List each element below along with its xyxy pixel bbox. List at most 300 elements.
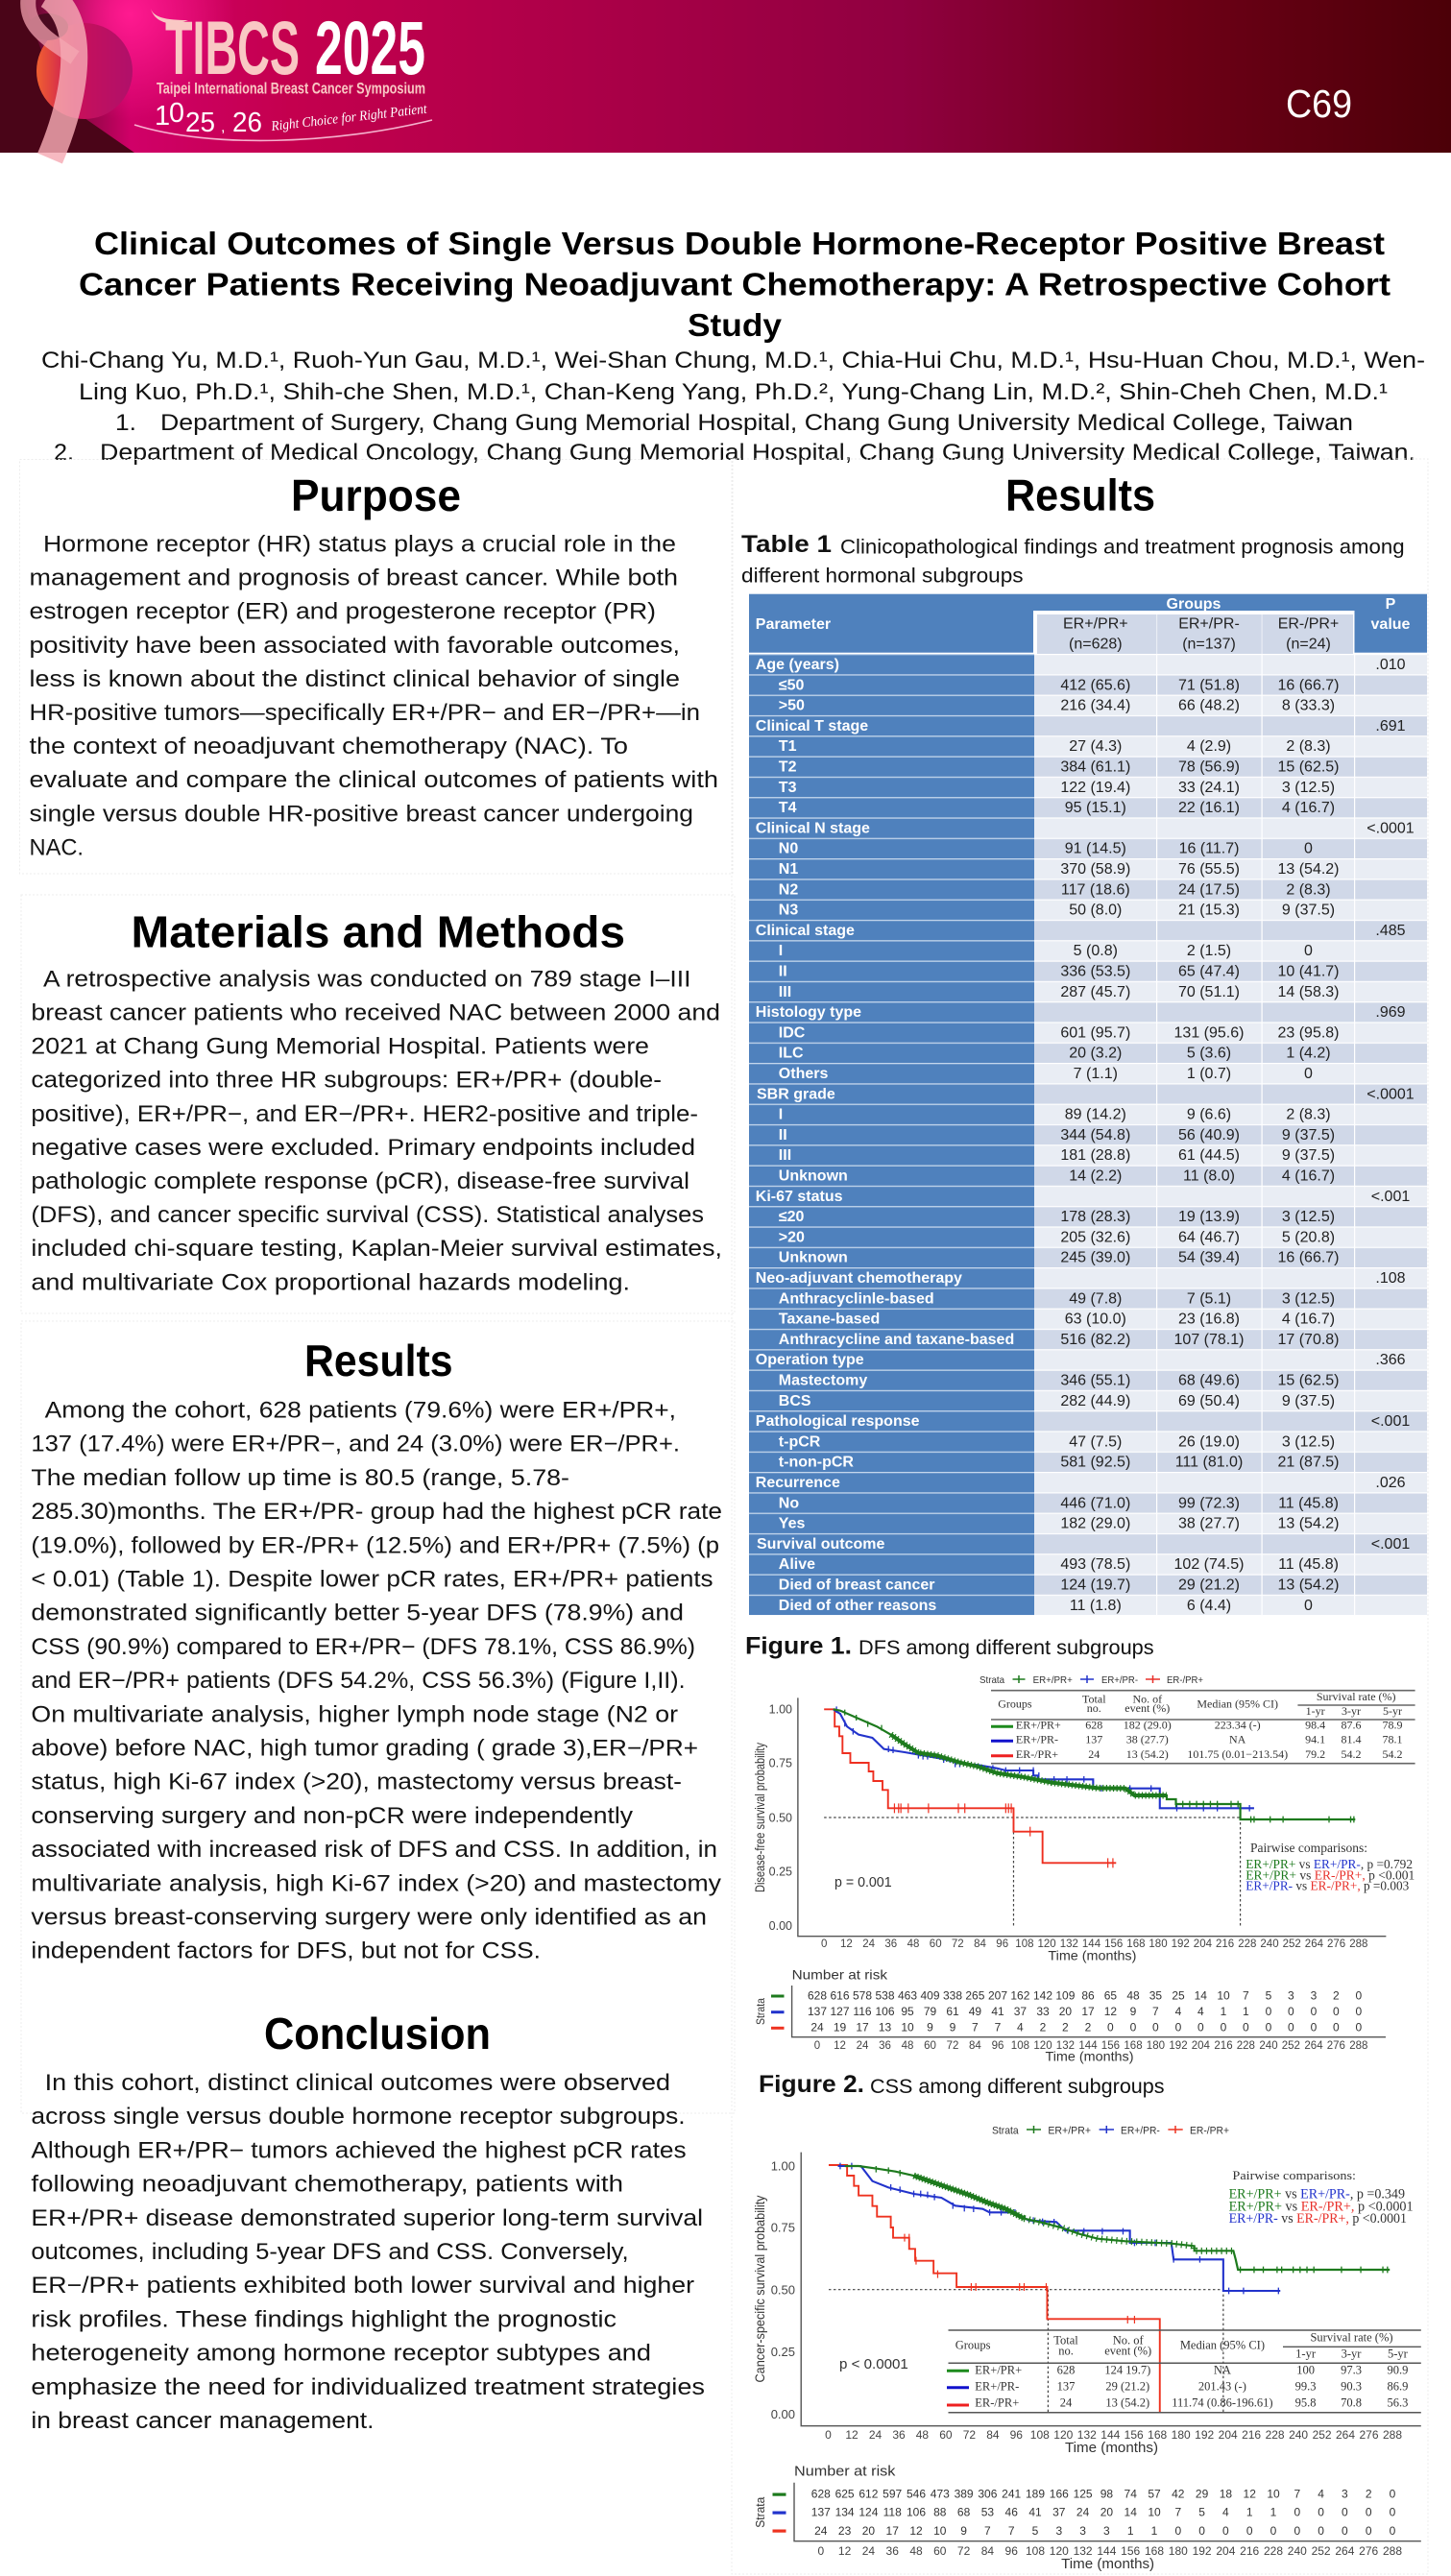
row labels: Recurrence bbox=[756, 1475, 840, 1491]
row values: .108 bbox=[1375, 1270, 1406, 1287]
number at risk table: 10 bbox=[933, 2524, 947, 2538]
number at risk table: 137 bbox=[808, 2005, 827, 2018]
number at risk table: 132 bbox=[1074, 2544, 1093, 2558]
heading: materials and methods: Materials and Methods bbox=[131, 907, 625, 957]
row values: 56 (40.9) bbox=[1178, 1127, 1240, 1144]
table header: (n=24) bbox=[1286, 636, 1331, 653]
number at risk table: 616 bbox=[830, 1988, 850, 2002]
row labels: N0 bbox=[779, 841, 798, 857]
inset survival table: 90.9 bbox=[1387, 2363, 1408, 2376]
conference dates: , bbox=[221, 119, 225, 135]
icon: pink ribbon bbox=[28, 0, 75, 158]
row values: 3 (12.5) bbox=[1282, 1433, 1335, 1450]
chart legend bbox=[992, 2125, 1229, 2136]
number at risk table: 20 bbox=[1059, 2005, 1072, 2018]
number at risk table: 9 bbox=[1130, 2005, 1137, 2018]
number at risk table: 192 bbox=[1193, 2544, 1212, 2558]
text block: purpose: evaluate and compare the clinical outcomes of patients with bbox=[29, 767, 718, 793]
x axis labels: 12 bbox=[845, 2428, 859, 2442]
number at risk table: 204 bbox=[1192, 2040, 1210, 2052]
inset survival table: Total bbox=[1053, 2334, 1078, 2347]
pairwise comparisons: ER+/PR+ vs ER+/PR-, p =0.792 bbox=[1245, 1858, 1413, 1872]
icon: globe bbox=[36, 23, 133, 119]
number at risk table: 53 bbox=[981, 2506, 994, 2519]
row values: 9 (37.5) bbox=[1282, 903, 1335, 919]
row values: 11 (8.0) bbox=[1183, 1168, 1235, 1185]
title: Study bbox=[688, 307, 783, 343]
x axis labels: 216 bbox=[1216, 1938, 1234, 1950]
number at risk table: 1 bbox=[1127, 2524, 1134, 2538]
number at risk table: 7 bbox=[1294, 2488, 1300, 2501]
row labels: Clinical T stage bbox=[756, 718, 868, 734]
figure 1 caption bbox=[745, 1633, 1154, 1660]
number at risk table: 2 bbox=[1333, 1988, 1340, 2002]
text block: purpose bbox=[29, 532, 718, 860]
row labels: Age (years) bbox=[756, 657, 839, 673]
number at risk table: 3 bbox=[1311, 1988, 1318, 2002]
figure 2 caption: CSS among different subgroups bbox=[870, 2076, 1165, 2098]
x axis title: Time (months) bbox=[1048, 1948, 1136, 1963]
inset survival table: 101.75 (0.01−213.54) bbox=[1187, 1747, 1288, 1761]
number at risk table: 0 bbox=[1175, 2021, 1182, 2034]
figure 2: CSS Kaplan-Meier chart bbox=[752, 2125, 1421, 2572]
number at risk table: 162 bbox=[1010, 1988, 1030, 2002]
y axis labels: 1.00 bbox=[769, 1703, 792, 1717]
x axis labels: 120 bbox=[1053, 2428, 1074, 2442]
title: Cancer Patients Receiving Neoadjuvant Chemotherapy: A Retrospective Cohort bbox=[79, 267, 1391, 301]
number at risk table: 48 bbox=[909, 2544, 923, 2558]
row labels: II bbox=[779, 1127, 787, 1144]
conference dates: 0 bbox=[169, 98, 184, 129]
y axis labels: 0.50 bbox=[769, 1811, 792, 1824]
row values: 7 (1.1) bbox=[1074, 1066, 1118, 1082]
row labels: III bbox=[779, 984, 791, 1000]
inset survival table: 5-yr bbox=[1388, 2347, 1409, 2361]
number at risk table: 7 bbox=[972, 2021, 979, 2034]
number at risk table: 0 bbox=[1243, 2021, 1249, 2034]
number at risk table: 168 bbox=[1145, 2544, 1164, 2558]
number at risk table: 116 bbox=[853, 2005, 872, 2018]
number at risk table: 88 bbox=[933, 2506, 947, 2519]
text block: purpose: Hormone receptor (HR) status plays a crucial role in the bbox=[43, 532, 676, 557]
inset survival table: 3-yr bbox=[1342, 1704, 1361, 1718]
number at risk table: 35 bbox=[1149, 1988, 1162, 2002]
row values: 61 (44.5) bbox=[1178, 1147, 1240, 1164]
inset survival table: 94.1 bbox=[1305, 1733, 1325, 1746]
text block: purpose: positivity have been associated with favorable outcomes, bbox=[29, 633, 680, 659]
row values: 22 (16.1) bbox=[1178, 800, 1240, 816]
number at risk table: 84 bbox=[981, 2544, 994, 2558]
number at risk table: 228 bbox=[1237, 2040, 1255, 2052]
inset survival table: 95.8 bbox=[1295, 2396, 1317, 2410]
inset survival table: Median (95% CI) bbox=[1197, 1697, 1278, 1710]
x axis labels: 120 bbox=[1038, 1938, 1056, 1950]
row labels: T2 bbox=[779, 758, 797, 776]
row values: 117 (18.6) bbox=[1061, 881, 1130, 898]
number at risk table: 37 bbox=[1052, 2506, 1066, 2519]
number at risk table: 628 bbox=[808, 1988, 827, 2002]
table header: ER-/PR+ bbox=[1278, 616, 1339, 632]
row labels: ≤20 bbox=[779, 1209, 804, 1225]
row values: 216 (34.4) bbox=[1060, 698, 1130, 714]
row labels: >20 bbox=[779, 1229, 805, 1245]
row values: 5 (20.8) bbox=[1282, 1229, 1335, 1245]
row values: 122 (19.4) bbox=[1060, 780, 1130, 796]
inset survival table: 24 bbox=[1060, 2396, 1073, 2410]
x axis labels: 132 bbox=[1077, 2428, 1097, 2442]
inset survival table: 97.3 bbox=[1341, 2363, 1362, 2376]
number at risk table: 0 bbox=[1390, 2524, 1396, 2538]
number at risk table: 23 bbox=[838, 2524, 852, 2538]
panel: results text bbox=[21, 1321, 735, 2434]
number at risk table: Number at risk bbox=[794, 2463, 896, 2479]
conference dates: 26 bbox=[232, 108, 262, 138]
number at risk table: 1 bbox=[1151, 2524, 1158, 2538]
row values: 33 (24.1) bbox=[1178, 780, 1240, 796]
row values: 17 (70.8) bbox=[1277, 1332, 1340, 1348]
row values: 107 (78.1) bbox=[1174, 1332, 1244, 1348]
x axis labels: 0 bbox=[821, 1938, 827, 1950]
number at risk table: 24 bbox=[814, 2524, 828, 2538]
x axis labels: 84 bbox=[986, 2428, 1000, 2442]
poster number: C69 bbox=[1286, 82, 1352, 126]
row values: 178 (28.3) bbox=[1060, 1209, 1130, 1225]
row labels bbox=[756, 657, 1014, 1614]
row labels: N1 bbox=[779, 861, 798, 878]
row values: 16 (11.7) bbox=[1179, 841, 1239, 857]
number at risk table: 463 bbox=[898, 1988, 917, 2002]
x axis labels: 156 bbox=[1125, 2428, 1144, 2442]
inset survival table: Survival rate (%) bbox=[1317, 1690, 1396, 1703]
row values: 9 (37.5) bbox=[1282, 1127, 1335, 1144]
affiliations: Department of Surgery, Chang Gung Memorial Hospital, Chang Gung University Medical College, Taiwan bbox=[160, 410, 1353, 436]
text block: conclusion: ER+/PR+ disease demonstrated superior long-term survival bbox=[31, 2205, 703, 2231]
number at risk table: 7 bbox=[1174, 2506, 1181, 2519]
x axis labels: 60 bbox=[939, 2428, 953, 2442]
pairwise comparisons bbox=[1245, 1842, 1415, 1893]
x axis labels: 168 bbox=[1148, 2428, 1168, 2442]
number at risk table: 127 bbox=[830, 2005, 850, 2018]
number at risk table: 2 bbox=[1085, 2021, 1092, 2034]
number at risk table: 1 bbox=[1270, 2506, 1277, 2519]
row values: 384 (61.1) bbox=[1060, 758, 1130, 776]
heading: results right: Results bbox=[1005, 470, 1155, 520]
inset survival table: 137 bbox=[1057, 2379, 1075, 2393]
row values: 346 (55.1) bbox=[1060, 1373, 1130, 1388]
inset survival table: Groups bbox=[955, 2339, 991, 2352]
row values: 102 (74.5) bbox=[1174, 1556, 1244, 1573]
chart legend: Strata bbox=[992, 2125, 1020, 2136]
inset survival table: No. of bbox=[1113, 2334, 1145, 2347]
text block: conclusion: emphasize the need for individualized treatment strategies bbox=[31, 2374, 705, 2400]
text block: conclusion: ER−/PR+ patients exhibited both lower survival and higher bbox=[31, 2273, 694, 2299]
number at risk table: 0 bbox=[1107, 2021, 1114, 2034]
number at risk table: 3 bbox=[1342, 2488, 1348, 2501]
row labels: T1 bbox=[779, 738, 797, 755]
row values: 16 (66.7) bbox=[1277, 677, 1340, 693]
text block: results: independent factors for DFS, but not for CSS. bbox=[31, 1938, 541, 1964]
number at risk table: 96 bbox=[992, 2040, 1004, 2052]
row labels: Operation type bbox=[756, 1352, 864, 1368]
authors bbox=[41, 348, 1425, 405]
number at risk table: 3 bbox=[1055, 2524, 1062, 2538]
number at risk table: 41 bbox=[991, 2005, 1004, 2018]
pairwise comparisons: ER+/PR+ vs ER-/PR+, p <0.001 bbox=[1245, 1868, 1415, 1883]
number at risk table: 625 bbox=[835, 2488, 855, 2501]
number at risk table: 106 bbox=[907, 2506, 926, 2519]
number at risk table: 108 bbox=[1026, 2544, 1045, 2558]
text block: methods: breast cancer patients who received NAC between 2000 and bbox=[31, 1000, 720, 1025]
number at risk table: 180 bbox=[1169, 2544, 1188, 2558]
text block: results: 285.30)months. The ER+/PR- group had the highest pCR rate bbox=[31, 1499, 722, 1525]
x axis labels: 36 bbox=[884, 1938, 897, 1950]
number at risk table: 7 bbox=[995, 2021, 1002, 2034]
row values: 95 (15.1) bbox=[1065, 800, 1126, 816]
number at risk table: 628 bbox=[811, 2488, 831, 2501]
inset survival table: 3-yr bbox=[1342, 2347, 1362, 2361]
table caption bbox=[741, 531, 1405, 588]
number at risk table: 74 bbox=[1125, 2488, 1137, 2501]
row labels: III bbox=[779, 1147, 791, 1164]
row values: <.0001 bbox=[1366, 820, 1415, 836]
x axis labels: 252 bbox=[1313, 2428, 1332, 2442]
number at risk table: 29 bbox=[1196, 2488, 1209, 2501]
figure 2 caption: Figure 2. bbox=[759, 2071, 864, 2098]
number at risk table: 0 bbox=[1342, 2524, 1348, 2538]
row labels: Died of other reasons bbox=[779, 1598, 936, 1614]
number at risk table: 72 bbox=[947, 2040, 958, 2052]
text block: conclusion: following neoadjuvant chemotherapy, patients with bbox=[31, 2172, 623, 2198]
text block: results: CSS (90.9%) compared to ER+/PR− (DFS 78.1%, CSS 86.9%) bbox=[31, 1634, 695, 1660]
number at risk table: 0 bbox=[814, 2040, 820, 2052]
number at risk table: 36 bbox=[886, 2544, 899, 2558]
row values: 2 (8.3) bbox=[1286, 738, 1331, 755]
number at risk table: 389 bbox=[955, 2488, 974, 2501]
number at risk table bbox=[753, 2463, 1421, 2572]
number at risk table: 0 bbox=[1152, 2021, 1159, 2034]
number at risk table: 14 bbox=[1195, 1988, 1207, 2002]
number at risk table: 0 bbox=[1355, 1988, 1362, 2002]
inset survival table: 54.2 bbox=[1383, 1747, 1402, 1761]
text block: methods: negative cases were excluded. Primary endpoints included bbox=[31, 1135, 695, 1161]
row values: 0 bbox=[1304, 943, 1313, 959]
affiliations bbox=[54, 410, 1415, 466]
pairwise comparisons: Pairwise comparisons: bbox=[1250, 1842, 1367, 1856]
text block: results: On multivariate analysis, higher lymph node stage (N2 or bbox=[31, 1701, 678, 1727]
inset survival table: ER+/PR- bbox=[975, 2379, 1019, 2393]
inset survival table: 628 bbox=[1057, 2363, 1075, 2376]
number at risk table: 612 bbox=[859, 2488, 879, 2501]
row values: 78 (56.9) bbox=[1178, 758, 1240, 776]
number at risk table: 276 bbox=[1327, 2040, 1345, 2052]
row values: .366 bbox=[1375, 1352, 1406, 1368]
number at risk table: 120 bbox=[1033, 2040, 1052, 2052]
chart legend bbox=[979, 1674, 1203, 1686]
number at risk table: 18 bbox=[1220, 2488, 1232, 2501]
row values: 23 (16.8) bbox=[1178, 1312, 1240, 1328]
row values: 9 (37.5) bbox=[1282, 1393, 1335, 1409]
number at risk table: 7 bbox=[984, 2524, 991, 2538]
row values: 70 (51.1) bbox=[1178, 984, 1240, 1000]
number at risk table: 106 bbox=[875, 2005, 895, 2018]
text block: results: associated with increased risk of DFS and CSS. In addition, in bbox=[31, 1837, 717, 1863]
text block: methods: categorized into three HR subgroups: ER+/PR+ (double- bbox=[31, 1068, 662, 1094]
number at risk table: 0 bbox=[1174, 2524, 1181, 2538]
number at risk table: 0 bbox=[1342, 2506, 1348, 2519]
text block: purpose: single versus double HR-positive breast cancer undergoing bbox=[29, 801, 693, 827]
row values: 14 (58.3) bbox=[1277, 984, 1340, 1000]
text block: conclusion: across single versus double hormone receptor subgroups. bbox=[31, 2104, 686, 2130]
number at risk table: 98 bbox=[1100, 2488, 1113, 2501]
text block: results: < 0.01) (Table 1). Despite lower pCR rates, ER+/PR+ patients bbox=[31, 1567, 713, 1592]
number at risk table: 120 bbox=[1050, 2544, 1069, 2558]
number at risk table: 17 bbox=[886, 2524, 899, 2538]
row values: 11 (45.8) bbox=[1278, 1556, 1339, 1573]
row values: 20 (3.2) bbox=[1069, 1046, 1122, 1062]
row values: <.001 bbox=[1371, 1536, 1410, 1553]
row values bbox=[1060, 657, 1415, 1614]
row values: 1 (0.7) bbox=[1187, 1066, 1231, 1082]
row values: 3 (12.5) bbox=[1282, 1209, 1335, 1225]
table header: value bbox=[1371, 616, 1411, 633]
row labels: IDC bbox=[779, 1024, 806, 1041]
row labels: Anthracyclinle-based bbox=[779, 1290, 934, 1307]
x axis labels: 84 bbox=[974, 1938, 986, 1950]
x axis labels: 264 bbox=[1305, 1938, 1324, 1950]
authors: Chi-Chang Yu, M.D.¹, Ruoh-Yun Gau, M.D.¹, Wei-Shan Chung, M.D.¹, Chia-Hui Chu, M.D.¹, Hsu-Huan Chou, M.D.¹, Wen- bbox=[41, 348, 1425, 373]
table 1 bbox=[749, 594, 1427, 1615]
y axis labels: 0.00 bbox=[769, 1919, 792, 1933]
number at risk table: 180 bbox=[1147, 2040, 1165, 2052]
number at risk table: 24 bbox=[810, 2021, 824, 2034]
number at risk table: 3 bbox=[1079, 2524, 1086, 2538]
row values: 370 (58.9) bbox=[1060, 861, 1130, 878]
number at risk table: 2 bbox=[1366, 2488, 1372, 2501]
row labels: t-pCR bbox=[779, 1433, 821, 1450]
row values: 412 (65.6) bbox=[1060, 677, 1130, 693]
text block: results: (19.0%), followed by ER-/PR+ (12.5%) and ER+/PR+ (7.5%) (p bbox=[31, 1532, 719, 1558]
number at risk table: 79 bbox=[924, 2005, 936, 2018]
number at risk table: 95 bbox=[901, 2005, 914, 2018]
number at risk table: 49 bbox=[969, 2005, 981, 2018]
text block: methods: and multivariate Cox proportional hazards modeling. bbox=[31, 1269, 630, 1295]
x axis labels: 216 bbox=[1242, 2428, 1261, 2442]
inset survival table: 79.2 bbox=[1305, 1747, 1325, 1761]
row values: 9 (37.5) bbox=[1282, 1147, 1335, 1164]
row values: 21 (87.5) bbox=[1277, 1455, 1340, 1471]
number at risk table: 144 bbox=[1078, 2040, 1098, 2052]
x axis labels: 156 bbox=[1104, 1938, 1123, 1950]
text block: methods: (DFS), and cancer specific survival (CSS). Statistical analyses bbox=[31, 1202, 704, 1228]
row values: 54 (39.4) bbox=[1178, 1250, 1240, 1266]
y axis title: Cancer-specific survival probability bbox=[752, 2195, 767, 2383]
inset survival table: 223.34 (-) bbox=[1215, 1719, 1261, 1732]
inset survival table: no. bbox=[1058, 2344, 1074, 2357]
number at risk table: 216 bbox=[1240, 2544, 1260, 2558]
pairwise comparisons: ER+/PR+ vs ER-/PR+, p <0.0001 bbox=[1229, 2199, 1414, 2214]
y axis labels bbox=[769, 1703, 792, 1933]
row labels: ILC bbox=[779, 1046, 804, 1062]
row values: 47 (7.5) bbox=[1069, 1433, 1122, 1450]
row values: 2 (8.3) bbox=[1286, 1107, 1331, 1123]
table header: Groups bbox=[1167, 596, 1221, 613]
table header: Parameter bbox=[756, 616, 831, 633]
row values: 0 bbox=[1304, 841, 1313, 857]
logo text: TIBCS 2025: 2025 bbox=[315, 5, 425, 90]
logo subtitle: Taipei International Breast Cancer Symposium bbox=[157, 80, 425, 98]
number at risk table: 48 bbox=[902, 2040, 913, 2052]
row labels: Clinical stage bbox=[756, 923, 855, 939]
chart legend: ER-/PR+ bbox=[1190, 2125, 1229, 2136]
row values: 336 (53.5) bbox=[1060, 964, 1130, 979]
number at risk table: 118 bbox=[883, 2506, 902, 2519]
row values: 493 (78.5) bbox=[1060, 1556, 1130, 1573]
inset survival table: 87.6 bbox=[1341, 1719, 1362, 1732]
row values: 0 bbox=[1304, 1598, 1313, 1614]
number at risk table: 0 bbox=[1288, 2005, 1294, 2018]
number at risk table: 0 bbox=[1221, 2021, 1227, 2034]
x axis labels: 0 bbox=[825, 2428, 832, 2442]
number at risk table: 9 bbox=[960, 2524, 967, 2538]
number at risk table: 48 bbox=[1126, 1988, 1140, 2002]
number at risk table: 240 bbox=[1259, 2040, 1278, 2052]
row values: <.001 bbox=[1371, 1189, 1410, 1205]
number at risk table: 473 bbox=[931, 2488, 950, 2501]
conference dates bbox=[155, 98, 262, 138]
row labels: T3 bbox=[779, 780, 797, 796]
pairwise comparisons: ER+/PR- vs ER-/PR+, p =0.003 bbox=[1245, 1879, 1409, 1893]
row values: 64 (46.7) bbox=[1178, 1229, 1240, 1245]
inset survival table: 86.9 bbox=[1387, 2379, 1408, 2393]
inset survival table: 90.3 bbox=[1341, 2379, 1362, 2393]
number at risk table: 60 bbox=[933, 2544, 947, 2558]
number at risk table: 2 bbox=[1062, 2021, 1069, 2034]
row labels: II bbox=[779, 964, 787, 979]
x axis labels: 252 bbox=[1283, 1938, 1301, 1950]
number at risk table: 10 bbox=[1267, 2488, 1280, 2501]
inset survival table: NA bbox=[1229, 1733, 1246, 1746]
row values: 4 (16.7) bbox=[1282, 1312, 1335, 1328]
row values: 6 (4.4) bbox=[1187, 1598, 1231, 1614]
inset survival table: 78.1 bbox=[1383, 1733, 1402, 1746]
text block: purpose: less is known about the distinct clinical behavior of single bbox=[29, 666, 680, 692]
row labels: Died of breast cancer bbox=[779, 1577, 935, 1594]
text block: results: Among the cohort, 628 patients (79.6%) were ER+/PR+, bbox=[45, 1398, 676, 1423]
x axis labels: 288 bbox=[1349, 1938, 1367, 1950]
inset survival table bbox=[991, 1690, 1415, 1764]
number at risk table: Strata bbox=[753, 2496, 767, 2528]
row labels: BCS bbox=[779, 1393, 811, 1409]
conference dates: 1 bbox=[155, 101, 170, 132]
number at risk table: 0 bbox=[1130, 2021, 1137, 2034]
row values: 7 (5.1) bbox=[1187, 1290, 1231, 1307]
number at risk table: 4 bbox=[1175, 2005, 1182, 2018]
number at risk table: 12 bbox=[1104, 2005, 1117, 2018]
row values: 50 (8.0) bbox=[1069, 903, 1122, 919]
x axis labels: 264 bbox=[1336, 2428, 1355, 2442]
row values: .691 bbox=[1375, 718, 1406, 734]
number at risk table: 0 bbox=[1366, 2506, 1372, 2519]
number at risk table: 306 bbox=[978, 2488, 998, 2501]
inset survival table: No. of bbox=[1132, 1692, 1162, 1705]
number at risk table: 20 bbox=[862, 2524, 875, 2538]
number at risk table: 0 bbox=[1311, 2021, 1318, 2034]
row values: <.001 bbox=[1371, 1413, 1410, 1430]
pairwise comparisons: ER+/PR+ vs ER+/PR-, p =0.349 bbox=[1229, 2186, 1405, 2202]
inset survival table: ER-/PR+ bbox=[975, 2396, 1019, 2410]
figure 1: DFS Kaplan-Meier chart bbox=[752, 1674, 1415, 2064]
number at risk table: 578 bbox=[853, 1988, 872, 2002]
